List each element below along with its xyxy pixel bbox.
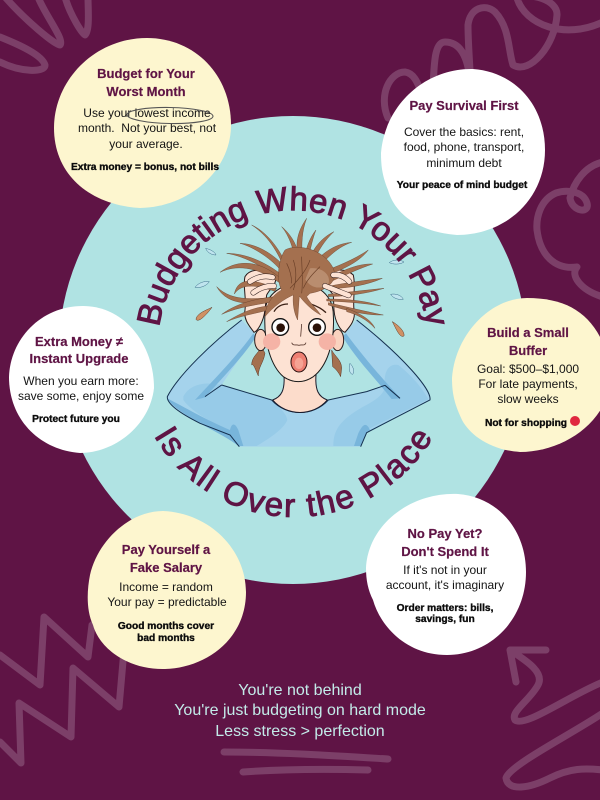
panel: pay survival first: Cover the basics: rent, — [404, 125, 524, 139]
neck — [273, 375, 327, 412]
lower hair wisps — [252, 347, 342, 377]
panel: no pay yet: account, it's imaginary — [386, 578, 504, 592]
panel: build a small buffer: Goal: $500–$1,000 — [477, 362, 579, 376]
closing message: You're not behind — [238, 682, 362, 699]
ears — [255, 329, 267, 351]
panel: no pay yet: No Pay Yet? — [408, 526, 483, 541]
panel: extra money: Protect future you — [32, 414, 120, 425]
curved title: Is All Over the Place — [154, 426, 431, 518]
panel: no pay yet — [366, 494, 526, 655]
closing message: You're just budgeting on hard mode — [174, 702, 426, 719]
panel: pay yourself a fake salary — [88, 511, 246, 669]
panel: build a small buffer: slow weeks — [497, 392, 559, 406]
panel: pay yourself a fake salary: Pay Yourself a — [122, 542, 211, 557]
panel: build a small buffer: Buffer — [509, 343, 547, 358]
eyes — [272, 319, 289, 335]
panel: build a small buffer: Not for shopping — [485, 418, 567, 429]
panel: budget for your worst month: your average. — [109, 137, 183, 151]
panel: pay survival first: food, phone, transport, — [404, 140, 524, 154]
panel: extra money: save some, enjoy some — [18, 389, 144, 403]
panel: budget for your worst month: Extra money = bonus, not bills — [71, 162, 219, 173]
panel: budget for your worst month: Worst Month — [106, 84, 186, 99]
panel: budget for your worst month — [54, 38, 231, 208]
panel: pay yourself a fake salary: Good months cover — [118, 621, 214, 632]
panel: extra money — [9, 306, 154, 453]
panel: pay yourself a fake salary: Fake Salary — [130, 560, 203, 575]
panel: budget for your worst month: month. Not your best, not — [78, 121, 217, 135]
face — [265, 283, 334, 382]
panel: pay yourself a fake salary: bad months — [137, 633, 195, 644]
panel: budget for your worst month: Use your lowest income — [83, 106, 211, 120]
closing message: Less stress > perfection — [215, 723, 385, 740]
panel: build a small buffer: Build a Small — [487, 325, 569, 340]
panel: build a small buffer — [452, 298, 600, 452]
fingers over hair — [250, 275, 349, 295]
panel: no pay yet: Don't Spend It — [401, 544, 489, 559]
panel: pay survival first — [381, 69, 545, 235]
closing message — [174, 682, 426, 740]
panel: no pay yet: Order matters: bills, — [397, 603, 494, 614]
panel: pay yourself a fake salary: Income = random — [119, 580, 213, 594]
hair highlight — [305, 268, 329, 288]
illustration: stressed woman pulling hair — [167, 218, 430, 447]
central teal circle — [59, 116, 527, 584]
panel: build a small buffer: For late payments, — [478, 377, 578, 391]
curved title — [136, 186, 445, 518]
curved title: Budgeting When Your Pay — [136, 186, 445, 326]
panel: pay survival first: minimum debt — [426, 156, 502, 170]
sweat drops — [195, 248, 404, 374]
icon: red circle — [570, 416, 580, 426]
panel: pay yourself a fake salary: Your pay = predictable — [107, 595, 227, 609]
panel: extra money: Instant Upgrade — [30, 351, 128, 366]
mouth — [291, 352, 307, 372]
hair — [217, 218, 384, 328]
panel: extra money: Extra Money ≠ — [35, 334, 123, 349]
sweater — [167, 320, 430, 447]
panel: no pay yet: savings, fun — [415, 614, 475, 625]
panel: pay survival first: Your peace of mind budget — [397, 180, 528, 191]
hands — [244, 270, 276, 332]
panel: budget for your worst month: Budget for Your — [97, 66, 195, 81]
panel: extra money: When you earn more: — [23, 374, 139, 388]
panel: pay survival first: Pay Survival First — [409, 98, 519, 113]
panel: no pay yet: If it's not in your — [403, 563, 487, 577]
